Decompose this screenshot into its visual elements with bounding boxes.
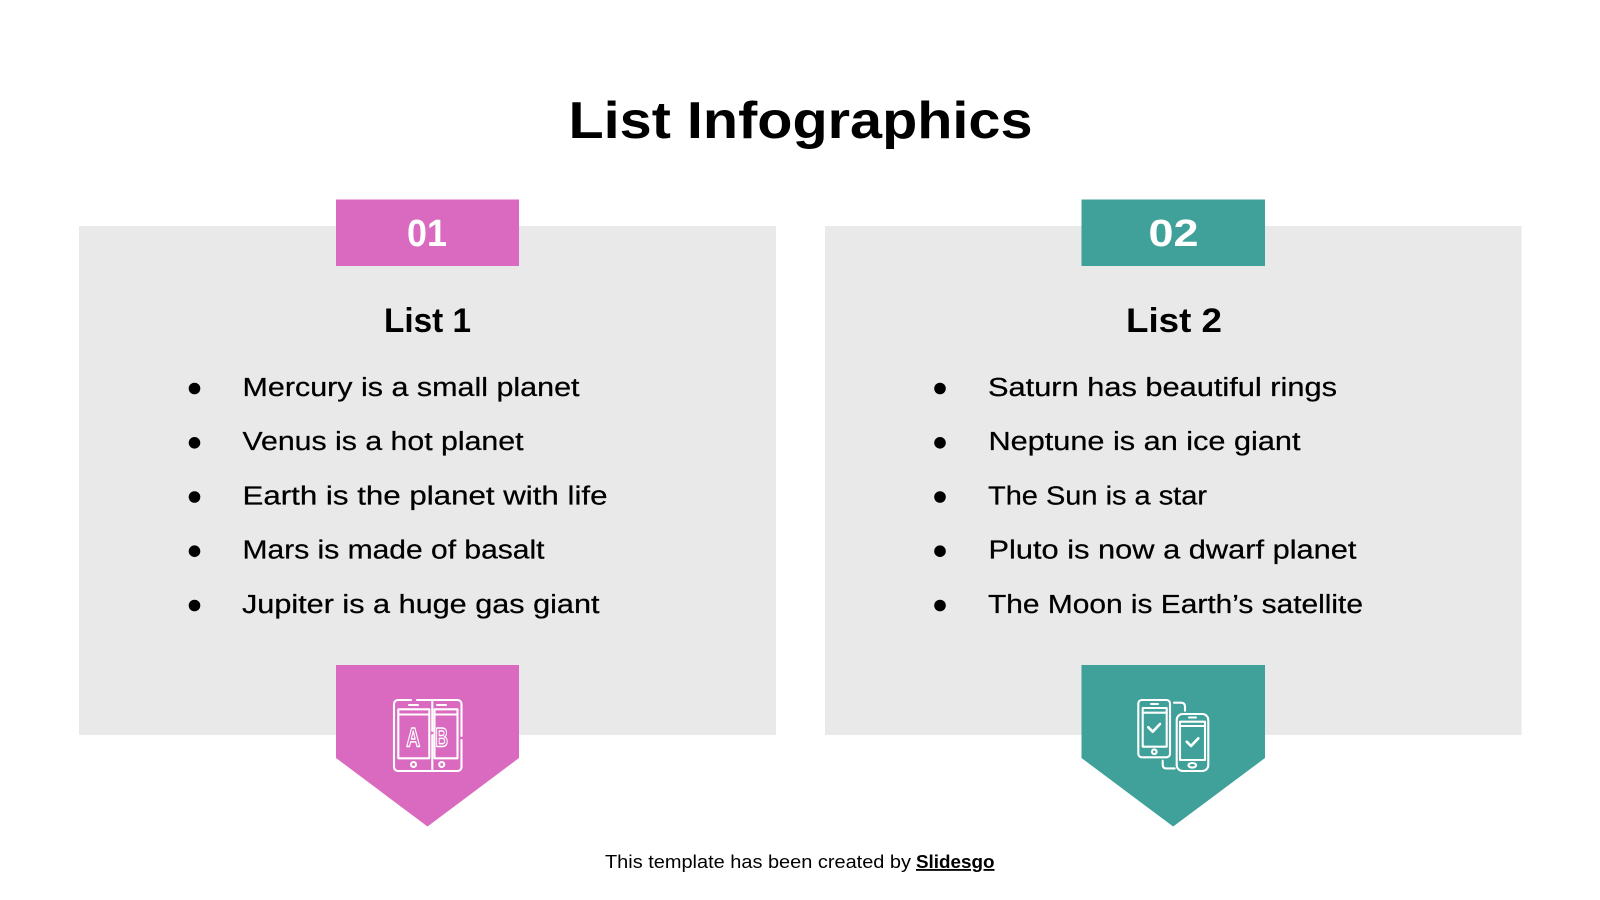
bullet list 1: Mars is made of basalt xyxy=(242,536,544,564)
bullet list 1: Venus is a hot planet xyxy=(242,428,524,456)
pentagon tag 1 xyxy=(336,665,519,826)
panel: list 1 xyxy=(79,200,776,826)
bullet list 2 xyxy=(934,374,1363,619)
title: List Infographics xyxy=(568,92,1032,150)
bullet list 2: Neptune is an ice giant xyxy=(988,428,1300,456)
number badge 02: 02 xyxy=(1148,213,1198,255)
icon: A/B phones: A xyxy=(406,722,420,752)
bullet list 2: Pluto is now a dwarf planet xyxy=(988,536,1356,564)
panel background 1 xyxy=(79,226,776,735)
icon: A/B phones xyxy=(394,700,462,771)
panel background 2 xyxy=(825,226,1522,735)
footer credit: This template has been created by xyxy=(605,851,912,872)
number badge 01 xyxy=(336,200,519,266)
bullet list 2: Saturn has beautiful rings xyxy=(988,374,1337,402)
bullet list 1: Jupiter is a huge gas giant xyxy=(242,591,600,619)
panel: list 2 xyxy=(825,200,1522,826)
number badge 01: 01 xyxy=(407,213,447,255)
bullet list 1: Mercury is a small planet xyxy=(242,374,580,402)
number badge 02 xyxy=(1082,200,1265,266)
heading: list 1: List 1 xyxy=(384,302,471,340)
footer credit: Slidesgo xyxy=(916,851,994,872)
icon: synced phones xyxy=(1138,700,1208,771)
icon: A/B phones: B xyxy=(436,722,448,752)
bullet list 1: Earth is the planet with life xyxy=(242,482,608,510)
pentagon tag 2 xyxy=(1082,665,1265,826)
heading: list 2: List 2 xyxy=(1126,302,1222,340)
bullet list 1 xyxy=(189,374,607,619)
bullet list 2: The Moon is Earth’s satellite xyxy=(988,591,1363,619)
bullet list 2: The Sun is a star xyxy=(988,482,1208,510)
